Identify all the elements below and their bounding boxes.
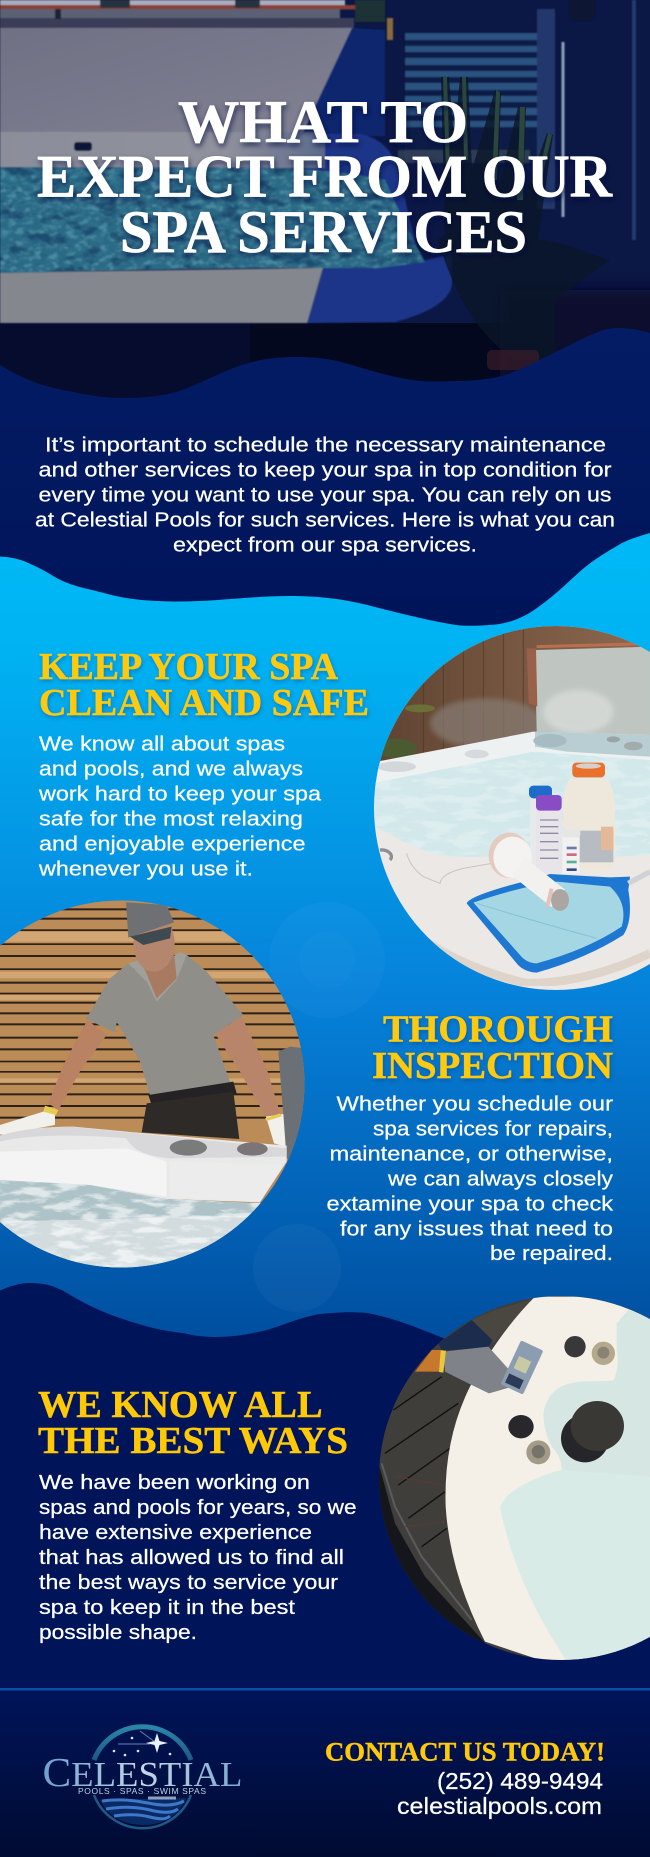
intro paragraph: at Celestial Pools for such services. Here is what you can [35,508,615,532]
text: thorough inspection: for any issues that need to [340,1218,613,1240]
heading: thorough inspection [372,1008,613,1087]
icon: control panel [501,1340,543,1395]
contact block: (252) 489-9494 [437,1768,603,1794]
text: thorough inspection: we can always closely [387,1168,614,1190]
text: we know all the best ways: the best ways to service your [39,1571,338,1594]
navy wave: intro background [0,328,650,626]
heading: keep your spa clean and safe: CLEAN AND SAFE [39,682,369,724]
icon: large chemical jug [563,763,615,871]
intro paragraph [35,434,615,556]
text: we know all the best ways: that has allowed us to find all [39,1546,344,1569]
text: we know all the best ways: have extensive experience [39,1521,312,1544]
intro paragraph: It’s important to schedule the necessary maintenance [45,434,606,456]
heading: thorough inspection: INSPECTION [372,1045,613,1087]
text: thorough inspection: be repaired. [490,1242,613,1265]
text: thorough inspection: spa services for repairs, [373,1118,613,1140]
text: keep your spa clean and safe: work hard to keep your spa [38,782,322,806]
contact block: CONTACT US TODAY! [325,1738,605,1766]
intro paragraph: and other services to keep your spa in top condition for [38,458,612,482]
logo: Celestial Pools: POOLS · SPAS · SWIM SPAS [78,1786,206,1796]
photo circle: spa with chemicals and skimmer net [370,620,650,995]
footer band [0,1688,650,1857]
logo: Celestial Pools: CELESTIAL [42,1749,242,1795]
icon: chemical floater [489,833,569,911]
heading: we know all the best ways: WE KNOW ALL [38,1384,322,1426]
title [37,89,613,265]
contact block: celestialpools.com [397,1793,602,1819]
text: thorough inspection: maintenance, or otherwise, [330,1142,613,1166]
icon: skimmer net [467,872,650,973]
heading: keep your spa clean and safe: KEEP YOUR SPA [39,646,339,688]
text: thorough inspection: extamine your spa to check [326,1192,614,1216]
contact block [325,1738,605,1819]
icon: potted plant [438,77,610,370]
icon: test bottles [529,786,580,873]
heading: thorough inspection: THOROUGH [383,1008,613,1050]
text: keep your spa clean and safe: We know all about spas [39,732,285,756]
text: keep your spa clean and safe: safe for the most relaxing [39,808,303,830]
text: keep your spa clean and safe: and enjoyable experience [39,832,306,856]
intro paragraph: expect from our spa services. [173,534,477,556]
text: we know all the best ways: spas and pools for years, so we [39,1496,356,1519]
text: we know all the best ways [39,1471,356,1644]
title: EXPECT FROM OUR [37,144,613,210]
title: SPA SERVICES [120,199,527,265]
logo: Celestial Pools [42,1727,242,1828]
text: thorough inspection: Whether you schedule our [336,1092,613,1116]
technician figure [0,902,286,1147]
heading: keep your spa clean and safe [39,646,369,724]
text: keep your spa clean and safe: and pools, and we always [39,758,303,780]
text: we know all the best ways: spa to keep it in the best [39,1596,295,1619]
text: keep your spa clean and safe [38,732,322,880]
text: thorough inspection [326,1092,614,1265]
heading: we know all the best ways [38,1384,348,1462]
intro paragraph: every time you want to use your spa. You can rely on us [38,484,612,506]
title: WHAT TO [178,89,468,155]
heading: we know all the best ways: THE BEST WAYS [38,1420,348,1462]
photo circle: overhead view of spa control panel [375,1290,650,1665]
photo circle: technician at spa [0,895,313,1275]
navy wave: lower section background [0,1283,650,1690]
hero photo: spa at dusk [0,0,650,410]
background: blue middle band [0,520,650,1350]
text: keep your spa clean and safe: whenever you use it. [38,858,253,880]
text: we know all the best ways: possible shape. [39,1621,197,1644]
text: we know all the best ways: We have been working on [39,1471,310,1494]
